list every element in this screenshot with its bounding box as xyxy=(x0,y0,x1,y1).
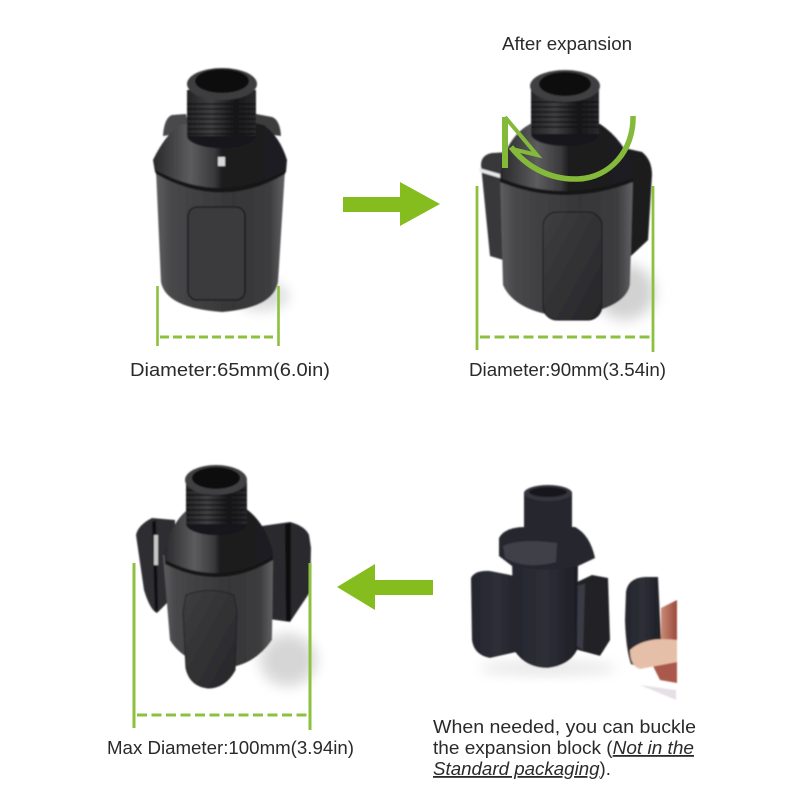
note text: When needed, you can buckle xyxy=(433,717,696,737)
dimension: 90mm xyxy=(477,186,653,352)
note text: the expansion block ( Not in the xyxy=(433,738,690,758)
label: expanded diameter: Diameter:90mm(3.54in) xyxy=(469,360,666,380)
heading: after expansion: After expansion xyxy=(502,34,632,54)
dimension: 100mm xyxy=(134,563,310,730)
label: max diameter: Max Diameter:100mm(3.94in) xyxy=(107,738,354,758)
arrow: right xyxy=(343,182,440,226)
note text: Standard packaging ). xyxy=(433,759,611,779)
product photo: expanded adapter xyxy=(479,70,655,320)
label: closed diameter: Diameter:65mm(6.0in) xyxy=(130,360,330,380)
arrow: left xyxy=(337,564,433,610)
product photo: closed adapter xyxy=(153,68,288,312)
product photo: buckling expansion block xyxy=(471,485,677,700)
dimension: 65mm xyxy=(158,286,278,346)
product photo: max expansion xyxy=(136,465,316,688)
rotation arrow xyxy=(505,116,633,179)
